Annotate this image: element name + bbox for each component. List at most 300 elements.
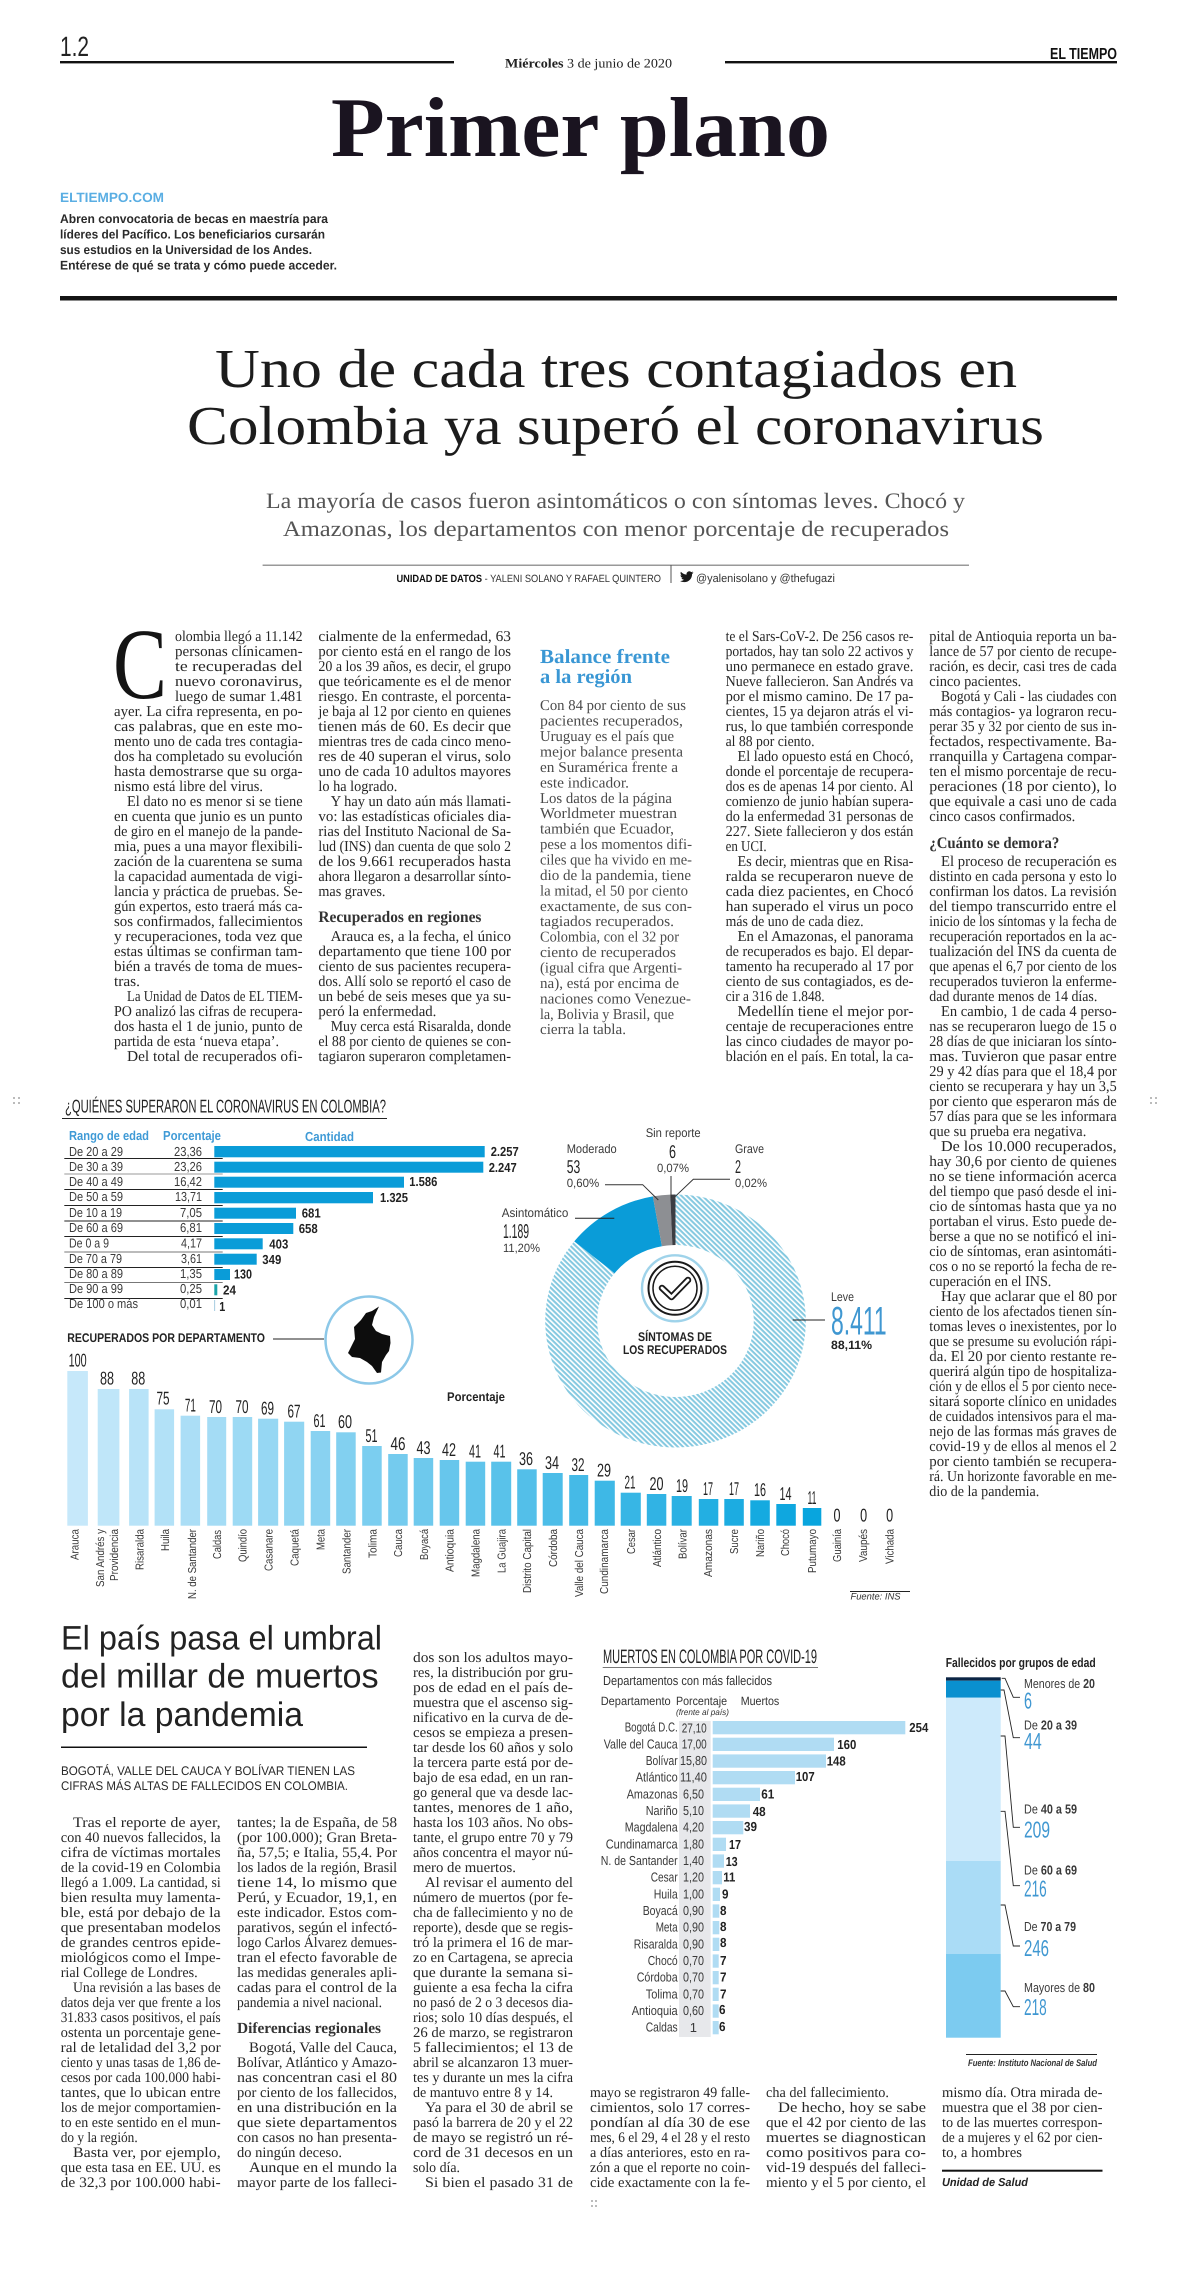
row: Chocó xyxy=(648,1953,726,1968)
second article column 3: 5 fallecimientos; el 13 de xyxy=(413,2040,573,2056)
section title: Primer plano xyxy=(331,81,830,175)
article column 5 xyxy=(929,629,1117,1500)
second article column 1: miológicos como el Impe- xyxy=(61,1950,221,1966)
label: De 20 a 39 xyxy=(1024,1718,1077,1754)
row: Valle del Cauca: 17,00 xyxy=(682,1736,707,1751)
article column 4: comienzo de junio habían supera- xyxy=(726,794,913,810)
sidebar text: Uruguay es el país que xyxy=(540,729,674,745)
article column 4: do la enfermedad 31 personas de xyxy=(726,809,914,825)
article column 1: en cuenta que junio es un punto xyxy=(114,809,303,825)
article column 5: nas se recuperaron luego de 15 o xyxy=(929,1019,1117,1035)
article column 5: covid-19 y de ellos al menos el 2 xyxy=(929,1439,1117,1455)
row: Bolívar: 148 xyxy=(827,1754,846,1768)
article column 4: El lado opuesto está en Chocó, xyxy=(738,749,913,765)
article column 1: olombia llegó a 11.142 xyxy=(175,629,303,645)
second article column 5: que el 42 por ciento de las xyxy=(766,2115,926,2131)
second article column 2: tiene 14, lo mismo que xyxy=(237,1875,397,1891)
department names: Meta xyxy=(316,1529,328,1550)
article column 4: ciento de sus contagiados, es de- xyxy=(726,974,913,990)
label: De 40 a 59 xyxy=(1024,1802,1077,1843)
article column 5: del tiempo transcurrido entre el xyxy=(929,899,1117,915)
subheadline: La mayoría de casos fueron asintomáticos o con síntomas leves. Chocó y xyxy=(266,488,965,513)
article column 2: 20 a los 39 años, es decir, el grupo xyxy=(318,659,511,675)
article column 4: centaje de recuperaciones entre xyxy=(726,1019,914,1035)
bar values: 100 xyxy=(69,1350,87,1371)
second article column 3: muestra que el ascenso sig- xyxy=(413,1695,573,1711)
row: De 20 a 29: De 20 a 29 xyxy=(69,1144,123,1159)
row: De 30 a 39: 23,26 xyxy=(174,1159,202,1174)
row: Bolívar: Bolívar xyxy=(646,1753,678,1768)
second article column 6: to de las muertes correspon- xyxy=(942,2115,1103,2131)
article column 5: hay 30,6 por ciento de quienes xyxy=(929,1154,1117,1170)
department names: Córdoba xyxy=(548,1528,560,1567)
second article column 3: tes y durante un mes la cifra xyxy=(413,2070,574,2086)
article column 5: ciento de los afectados tienen sín- xyxy=(929,1304,1117,1320)
second article column 2: (por 100.000); Gran Breta- xyxy=(237,1830,397,1846)
department names: Sucre xyxy=(729,1529,741,1554)
chart title: Muertos en Colombia por covid-19 xyxy=(603,1646,818,1688)
bar values: 0 xyxy=(860,1505,867,1526)
second article column 5: como positivos para co- xyxy=(766,2145,926,2161)
row: Valle del Cauca: Valle del Cauca xyxy=(604,1736,678,1751)
article column 1: sos confirmados, fallecimientos xyxy=(114,914,303,930)
article column 5: 29 y 42 días para que el 18,4 por xyxy=(929,1064,1117,1080)
row: Tolima: Tolima xyxy=(646,1986,678,2001)
main headline: Uno de cada tres contagiados en xyxy=(215,338,1017,399)
article column 5: mas. Tuvieron que pasar entre xyxy=(929,1049,1117,1065)
sidebar text: la, Bolivia y Brasil, que xyxy=(540,1007,674,1023)
row: N. de Santander: N. de Santander xyxy=(601,1853,678,1868)
second article column 5: muertes se diagnostican xyxy=(766,2130,927,2146)
row: Valle del Cauca xyxy=(604,1736,856,1752)
second article column 3: Ya para el 30 de abril se xyxy=(425,2100,573,2116)
second article column 2: Bolívar, Atlántico y Amazo- xyxy=(237,2055,397,2071)
row: Bogotá D.C.: 254 xyxy=(909,1720,929,1735)
subheading: Recuperados en regiones: Recuperados en regiones xyxy=(318,909,481,926)
sidebar text: ciento de recuperados xyxy=(540,945,676,961)
row: Valle del Cauca: 160 xyxy=(837,1737,856,1752)
row: De 20 a 29: 2.257 xyxy=(491,1144,519,1159)
article column 2: lo ha logrado. xyxy=(318,779,397,795)
article column 2: de los 9.661 recuperados hasta xyxy=(318,854,511,870)
article column 4: portados, hay tan solo 22 activos y xyxy=(726,644,914,660)
article column 5: recuperados tuvieron la enferme- xyxy=(929,974,1117,990)
department names: La Guajira xyxy=(496,1529,508,1573)
article column 1: mento uno de cada tres contagia- xyxy=(114,734,303,750)
department names: Putumayo xyxy=(807,1529,819,1573)
department names: Cundinamarca xyxy=(599,1528,611,1594)
chart subtitle: Departamentos con más fallecidos xyxy=(603,1673,772,1688)
article column 5: tualización del INS da cuenta de xyxy=(929,944,1117,960)
row: Cundinamarca: 1,80 xyxy=(683,1836,704,1851)
second article column 2: en una distribución en la xyxy=(237,2100,398,2116)
bar values: 71 xyxy=(185,1394,196,1416)
column headers xyxy=(69,1128,354,1144)
row: Cundinamarca xyxy=(606,1836,741,1852)
second article column 4: cide exactamente con la fe- xyxy=(590,2175,750,2191)
article column 2: que teóricamente es el de menor xyxy=(318,674,511,690)
article column 2: ahora llegaron a desarrollar sínto- xyxy=(318,869,511,885)
row: N. de Santander: 13 xyxy=(726,1854,738,1869)
subheading: recuperados por departamento: RECUPERADOS POR DEPARTAMENTO xyxy=(67,1331,265,1345)
article column 5: dio de la pandemia. xyxy=(929,1484,1039,1500)
article column 5: cuperación en el INS. xyxy=(929,1274,1051,1290)
article column 4: más de uno de cada diez. xyxy=(726,914,864,930)
article column 4: al 88 por ciento. xyxy=(726,734,815,750)
second article column 3: de mantuvo entre 8 y 14. xyxy=(413,2085,553,2101)
second article headline: El país pasa el umbral xyxy=(61,1620,382,1658)
sidebar text: mejor balance presenta xyxy=(540,744,683,760)
second article column 2: las medidas generales apli- xyxy=(237,1965,397,1981)
callout: Sin reporte: Sin reporte xyxy=(646,1126,701,1140)
second article column 3: tar desde los 60 años y solo xyxy=(413,1740,573,1756)
bar chart: deaths by department xyxy=(601,1694,929,2037)
bar values xyxy=(69,1350,893,1526)
article column 1: El dato no es menor si se tiene xyxy=(127,794,303,810)
row: Nariño xyxy=(646,1803,766,1819)
row: Boyacá xyxy=(643,1903,726,1918)
sidebar text: cierra la tabla. xyxy=(540,1022,626,1038)
second article headline: del millar de muertos xyxy=(61,1658,379,1696)
row: Córdoba: 0,70 xyxy=(683,1970,704,1985)
article column 1: dos hasta el 1 de junio, punto de xyxy=(114,1019,303,1035)
bar values: 42 xyxy=(442,1439,456,1460)
row: Atlántico: 11,40 xyxy=(680,1770,707,1785)
row: De 60 a 69: 658 xyxy=(299,1221,318,1236)
article column 1: zación de la cuarentena se suma xyxy=(114,854,303,870)
row: Amazonas: 61 xyxy=(761,1786,774,1801)
article column 2: por ciento está en el rango de los xyxy=(318,644,511,660)
article column 1: la capacidad aumentada de vigi- xyxy=(114,869,303,885)
sidebar text: ciles que ha vivido en me- xyxy=(540,852,692,868)
bar values: 0 xyxy=(886,1505,893,1526)
row: Antioquia: 0,60 xyxy=(683,2003,704,2018)
label: Menores de 20: Menores de 20 xyxy=(1024,1676,1095,1691)
article column 2: mas graves. xyxy=(318,884,385,900)
department names: Bolívar xyxy=(678,1529,690,1559)
second article column 2: Bogotá, Valle del Cauca, xyxy=(249,2040,397,2056)
column headers: Porcentaje xyxy=(163,1128,221,1143)
department names: Boyacá xyxy=(419,1529,431,1560)
bar values: 67 xyxy=(288,1400,300,1422)
bar values: 61 xyxy=(314,1410,326,1431)
row: Bolívar: 15,80 xyxy=(680,1753,707,1768)
second article column 1: con 40 nuevos fallecidos, la xyxy=(61,1830,221,1846)
row: Atlántico: 107 xyxy=(796,1769,815,1784)
second article column 1: Basta ver, por ejemplo, xyxy=(73,2145,221,2161)
bar values: 36 xyxy=(519,1448,533,1469)
connector lines xyxy=(1001,1678,1020,2007)
row: Córdoba: Córdoba xyxy=(637,1970,678,1985)
donut chart: symptoms of recovered xyxy=(502,1126,887,1448)
row: De 50 a 59: 1.325 xyxy=(380,1190,408,1205)
source note: Instituto Nacional de Salud: Fuente: Instituto Nacional de Salud xyxy=(968,2058,1097,2069)
row: De 0 a 9 xyxy=(69,1236,288,1252)
row: Córdoba xyxy=(637,1970,726,1985)
second article column 3: go general que va desde lac- xyxy=(413,1785,573,1801)
article column 5: querirá algún tipo de hospitaliza- xyxy=(929,1364,1117,1380)
label: Menores de 20: 6 xyxy=(1024,1687,1032,1713)
row: De 100 o más xyxy=(69,1296,225,1314)
author signature: Unidad de Salud xyxy=(942,2177,1029,2189)
row: Cesar: 11 xyxy=(723,1870,735,1884)
article column 1: nismo está libre del virus. xyxy=(114,779,263,795)
sidebar text: naciones como Venezue- xyxy=(540,991,691,1007)
source note: Instituto Nacional de Salud xyxy=(966,2054,1097,2069)
second article column 2: mayor parte de los falleci- xyxy=(237,2175,397,2191)
chart headers: Muertos xyxy=(741,1694,779,1708)
row: De 50 a 59: 13,71 xyxy=(175,1189,202,1204)
article column 1 xyxy=(113,608,303,1065)
department names: Valle del Cauca xyxy=(574,1528,586,1597)
row: Antioquia: 6 xyxy=(719,2002,726,2017)
row: Risaralda xyxy=(634,1935,726,1951)
second article column 3: nificativo en la curva de de- xyxy=(413,1710,573,1726)
department names: Vichada xyxy=(885,1528,897,1564)
sidebar text: tagiados recuperados. xyxy=(540,914,674,930)
sidebar text xyxy=(540,698,692,1038)
row: Magdalena: 4,20 xyxy=(683,1820,704,1835)
drop cap: C xyxy=(113,608,167,720)
article column 1: La Unidad de Datos de EL TIEM- xyxy=(127,989,303,1005)
second article column 1: 31.833 casos positivos, el país xyxy=(61,2010,221,2026)
article column 2: un bebé de seis meses que ya su- xyxy=(318,989,511,1005)
second article column 5: De hecho, hoy se sabe xyxy=(778,2100,926,2116)
article column 4: tamento ha recuperado al 17 por xyxy=(726,959,913,975)
second article column 1: que esta tasa en EE. UU. es xyxy=(61,2160,221,2176)
callout: Grave xyxy=(675,1142,767,1197)
second article column 3: mero de muertos. xyxy=(413,1860,516,1876)
row: N. de Santander xyxy=(601,1853,738,1869)
teaser text: Abren convocatoria de becas en maestría para xyxy=(60,212,329,226)
second article column 5: miento y el 5 por ciento, el xyxy=(766,2175,926,2191)
row: De 80 a 89: 130 xyxy=(234,1266,252,1282)
row: Tolima: 7 xyxy=(720,1986,726,2001)
second article column 2: nas concentran casi el 80 xyxy=(237,2070,397,2086)
authors: UNIDAD DE DATOS - YALENI SOLANO Y RAFAEL QUINTERO xyxy=(396,573,661,585)
callout: Asintomático: 1.189 xyxy=(503,1221,529,1243)
article column 2: peró la enfermedad. xyxy=(318,1004,436,1020)
article column 5: 28 días de que iniciaran los sínto- xyxy=(929,1034,1117,1050)
article column 5: que se presume su evolución rápi- xyxy=(929,1334,1117,1350)
department names: Cauca xyxy=(393,1528,405,1557)
twitter handles: @yalenisolano y @thefugazi xyxy=(696,573,835,585)
second article column 2: do ningún deceso. xyxy=(237,2145,342,2161)
callout: Asintomático: 11,20% xyxy=(503,1241,540,1255)
bar values: 41 xyxy=(494,1440,506,1462)
second article column 5 xyxy=(766,2085,927,2191)
article column 5: Bogotá y Cali - las ciudades con xyxy=(941,689,1117,705)
row: Caldas: 1 xyxy=(690,2020,697,2035)
article column 5: inicio de los síntomas y la fecha de xyxy=(929,914,1117,930)
article column 1: dos ha completado su evolución xyxy=(114,749,303,765)
article column 2: rias del Instituto Nacional de Sa- xyxy=(318,824,511,840)
row: De 40 a 49 xyxy=(69,1174,437,1189)
row: Atlántico xyxy=(636,1769,815,1785)
second article column 2: pandemia a nivel nacional. xyxy=(237,1995,382,2011)
stacked bar: deaths by age group xyxy=(946,1655,1096,2038)
article column 4: te el Sars-CoV-2. De 256 casos re- xyxy=(726,629,913,645)
sidebar text: (igual cifra que Argenti- xyxy=(540,960,682,976)
bar values: 69 xyxy=(261,1398,274,1418)
department names: Chocó xyxy=(780,1529,792,1556)
row: N. de Santander: 1,40 xyxy=(683,1853,704,1868)
label: De 40 a 59: 209 xyxy=(1024,1817,1050,1843)
article column 4: Nueve fallecieron. San Andrés va xyxy=(726,674,914,690)
callout: Moderado: 0,60% xyxy=(567,1176,600,1190)
article column 2: res de 40 superan el virus, solo xyxy=(318,749,511,765)
stacked bar xyxy=(946,1677,1001,2038)
article column 2: el 88 por ciento de quienes se con- xyxy=(318,1034,511,1050)
row: Cesar xyxy=(651,1870,735,1885)
row: De 80 a 89: 1,35 xyxy=(180,1266,202,1281)
sidebar text: en Suramérica frente a xyxy=(540,760,678,776)
second article column 3: reporte), desde que se regis- xyxy=(413,1920,573,1936)
second article column 2: por ciento de los fallecidos, xyxy=(237,2085,397,2101)
main headline xyxy=(187,338,1044,456)
callout: Grave: Grave xyxy=(735,1142,764,1156)
bar values: 32 xyxy=(572,1454,584,1475)
article column 2: vo: las estadísticas oficiales dia- xyxy=(318,809,511,825)
second article column 4: zón a que el reporte no coin- xyxy=(590,2160,750,2176)
article column 1: de giro en el manejo de la pande- xyxy=(114,824,303,840)
label: De 70 a 79: 246 xyxy=(1024,1935,1049,1961)
article column 5: cio de síntomas, eran asintomáti- xyxy=(929,1244,1117,1260)
second article column 1 xyxy=(61,1815,221,2191)
bar values: 70 xyxy=(236,1396,248,1417)
bar values: 16 xyxy=(754,1479,766,1500)
bar values: 19 xyxy=(676,1475,688,1496)
row: Amazonas: Amazonas xyxy=(627,1786,678,1801)
row: De 80 a 89 xyxy=(69,1266,252,1282)
second article column 2: con casos no han presenta- xyxy=(237,2130,397,2146)
article column 5: distinto en cada persona y esto lo xyxy=(929,869,1117,885)
second article column 3: tante, el grupo entre 70 y 79 xyxy=(413,1830,573,1846)
article column 1: mia, pues a una mayor flexibili- xyxy=(114,839,303,855)
row: Tolima xyxy=(646,1986,726,2001)
row: De 40 a 49: De 40 a 49 xyxy=(69,1174,123,1189)
sidebar text: la mitad, el 50 por ciento xyxy=(540,883,688,899)
column chart: recovered percentage by department xyxy=(67,1350,897,1599)
row: Meta: Meta xyxy=(656,1920,678,1935)
row: Córdoba: 7 xyxy=(720,1970,726,1985)
callout: Leve: 8.411 xyxy=(831,1299,887,1343)
label: Mayores de 80: 218 xyxy=(1024,1994,1047,2020)
row: Risaralda: 8 xyxy=(720,1935,726,1950)
article column 5: cio de síntomas hasta que ya no xyxy=(929,1199,1117,1215)
sidebar text: este indicador. xyxy=(540,775,629,791)
second article column 1: do y la región. xyxy=(61,2130,138,2146)
article column 5: 57 días para que se les informara xyxy=(929,1109,1117,1125)
department names: Tolima xyxy=(368,1528,380,1558)
row: Boyacá: 0,90 xyxy=(683,1903,704,1918)
row: Nariño: 48 xyxy=(753,1804,766,1819)
article column 4: en UCI. xyxy=(726,839,767,855)
second article column 1: tantes, que lo ubican entre xyxy=(61,2085,221,2101)
column headers: Rango de edad xyxy=(69,1128,149,1143)
second article column 2: que siete departamentos xyxy=(237,2115,397,2131)
row: Cesar: 1,20 xyxy=(683,1870,704,1885)
donut center label: SÍNTOMAS DE xyxy=(638,1329,712,1344)
sidebar heading xyxy=(540,646,670,688)
label: Menores de 20 xyxy=(1024,1676,1095,1713)
department names: Distrito Capital xyxy=(522,1529,534,1593)
article column 4: cir a 316 de 1.848. xyxy=(726,989,825,1005)
article column 2: dos. Allí solo se reportó el caso de xyxy=(318,974,511,990)
row: Meta: 0,90 xyxy=(683,1920,704,1935)
article column 4: rus, lo que también corresponde xyxy=(726,719,914,735)
row: Huila: 9 xyxy=(722,1886,728,1901)
department names: Atlántico xyxy=(652,1529,664,1567)
bar values: 41 xyxy=(469,1440,481,1462)
article column 5: berse a que no se notificó el ini- xyxy=(929,1229,1117,1245)
row: Boyacá: Boyacá xyxy=(643,1903,678,1918)
callout: Sin reporte: 6 xyxy=(669,1141,676,1162)
row: De 70 a 79: De 70 a 79 xyxy=(69,1251,122,1266)
teaser label: ELTIEMPO.COM xyxy=(60,190,164,205)
teaser text: sus estudios en la Universidad de los Andes. xyxy=(60,243,312,257)
callout: Leve xyxy=(793,1290,887,1352)
article column 2: mientras tres de cada cinco meno- xyxy=(318,734,511,750)
row: De 40 a 49: 16,42 xyxy=(174,1174,202,1189)
sidebar text: Los datos de la página xyxy=(540,791,672,807)
bar values: 0 xyxy=(834,1505,840,1526)
bar values: 17 xyxy=(703,1478,713,1499)
article column 2: cialmente de la enfermedad, 63 xyxy=(318,629,511,645)
label: Porcentaje: Porcentaje xyxy=(447,1390,505,1404)
column headers: Cantidad xyxy=(305,1129,354,1144)
second article headline xyxy=(61,1620,382,1734)
article column 4: En el Amazonas, el panorama xyxy=(738,929,914,945)
row: De 100 o más: 0,01 xyxy=(180,1296,202,1311)
bar values: 11 xyxy=(808,1487,816,1508)
row: Huila: Huila xyxy=(654,1886,678,1901)
article column 5: De los 10.000 recuperados, xyxy=(941,1139,1117,1155)
second article column 1: de grandes centros epide- xyxy=(61,1935,221,1951)
donut ring xyxy=(545,1194,806,1448)
department names: Casanare xyxy=(263,1529,275,1571)
second article column 2: Aunque en el mundo la xyxy=(249,2160,398,2176)
second article column 2: tantes; la de España, de 58 xyxy=(237,1815,397,1831)
second article column 6: muestra que el 38 por cien- xyxy=(942,2100,1103,2116)
article column 4: cada diez pacientes, en Chocó xyxy=(726,884,913,900)
row: De 30 a 39: 2.247 xyxy=(489,1160,517,1175)
second article column 3: cesos se empieza a presen- xyxy=(413,1725,573,1741)
subheading: ¿Cuánto se demora?: ¿Cuánto se demora? xyxy=(929,835,1059,852)
label: De 40 a 59: De 40 a 59 xyxy=(1024,1802,1077,1816)
article column 1: te recuperadas del xyxy=(175,659,303,675)
newspaper name: EL TIEMPO xyxy=(1050,46,1117,63)
article column 2: tagiaron superaron completamen- xyxy=(318,1049,511,1065)
row: Cesar: Cesar xyxy=(651,1870,678,1885)
subheadline xyxy=(266,488,965,541)
row: De 30 a 39 xyxy=(69,1159,517,1175)
row: De 100 o más: De 100 o más xyxy=(69,1296,138,1311)
chart title: Muertos en Colombia por covid-19: MUERTOS EN COLOMBIA POR COVID-19 xyxy=(603,1646,817,1668)
row: De 0 a 9: 4,17 xyxy=(181,1236,202,1250)
label: De 60 a 69: De 60 a 69 xyxy=(1024,1862,1077,1878)
article column 1: gún expertos, esto traerá más ca- xyxy=(114,899,303,915)
second article column 1: que presentaban modelos xyxy=(61,1920,221,1936)
second article column 2 xyxy=(237,1815,398,2191)
row: De 70 a 79 xyxy=(69,1251,281,1267)
second article column 3: bajo de esa edad, en un ran- xyxy=(413,1770,573,1786)
bar values: 46 xyxy=(390,1433,406,1454)
sidebar text: también que Ecuador, xyxy=(540,822,674,838)
row: Atlántico: Atlántico xyxy=(636,1770,678,1785)
row: De 30 a 39: De 30 a 39 xyxy=(69,1159,123,1174)
second article column 3: pasó la barrera de 20 y el 22 xyxy=(413,2115,573,2131)
